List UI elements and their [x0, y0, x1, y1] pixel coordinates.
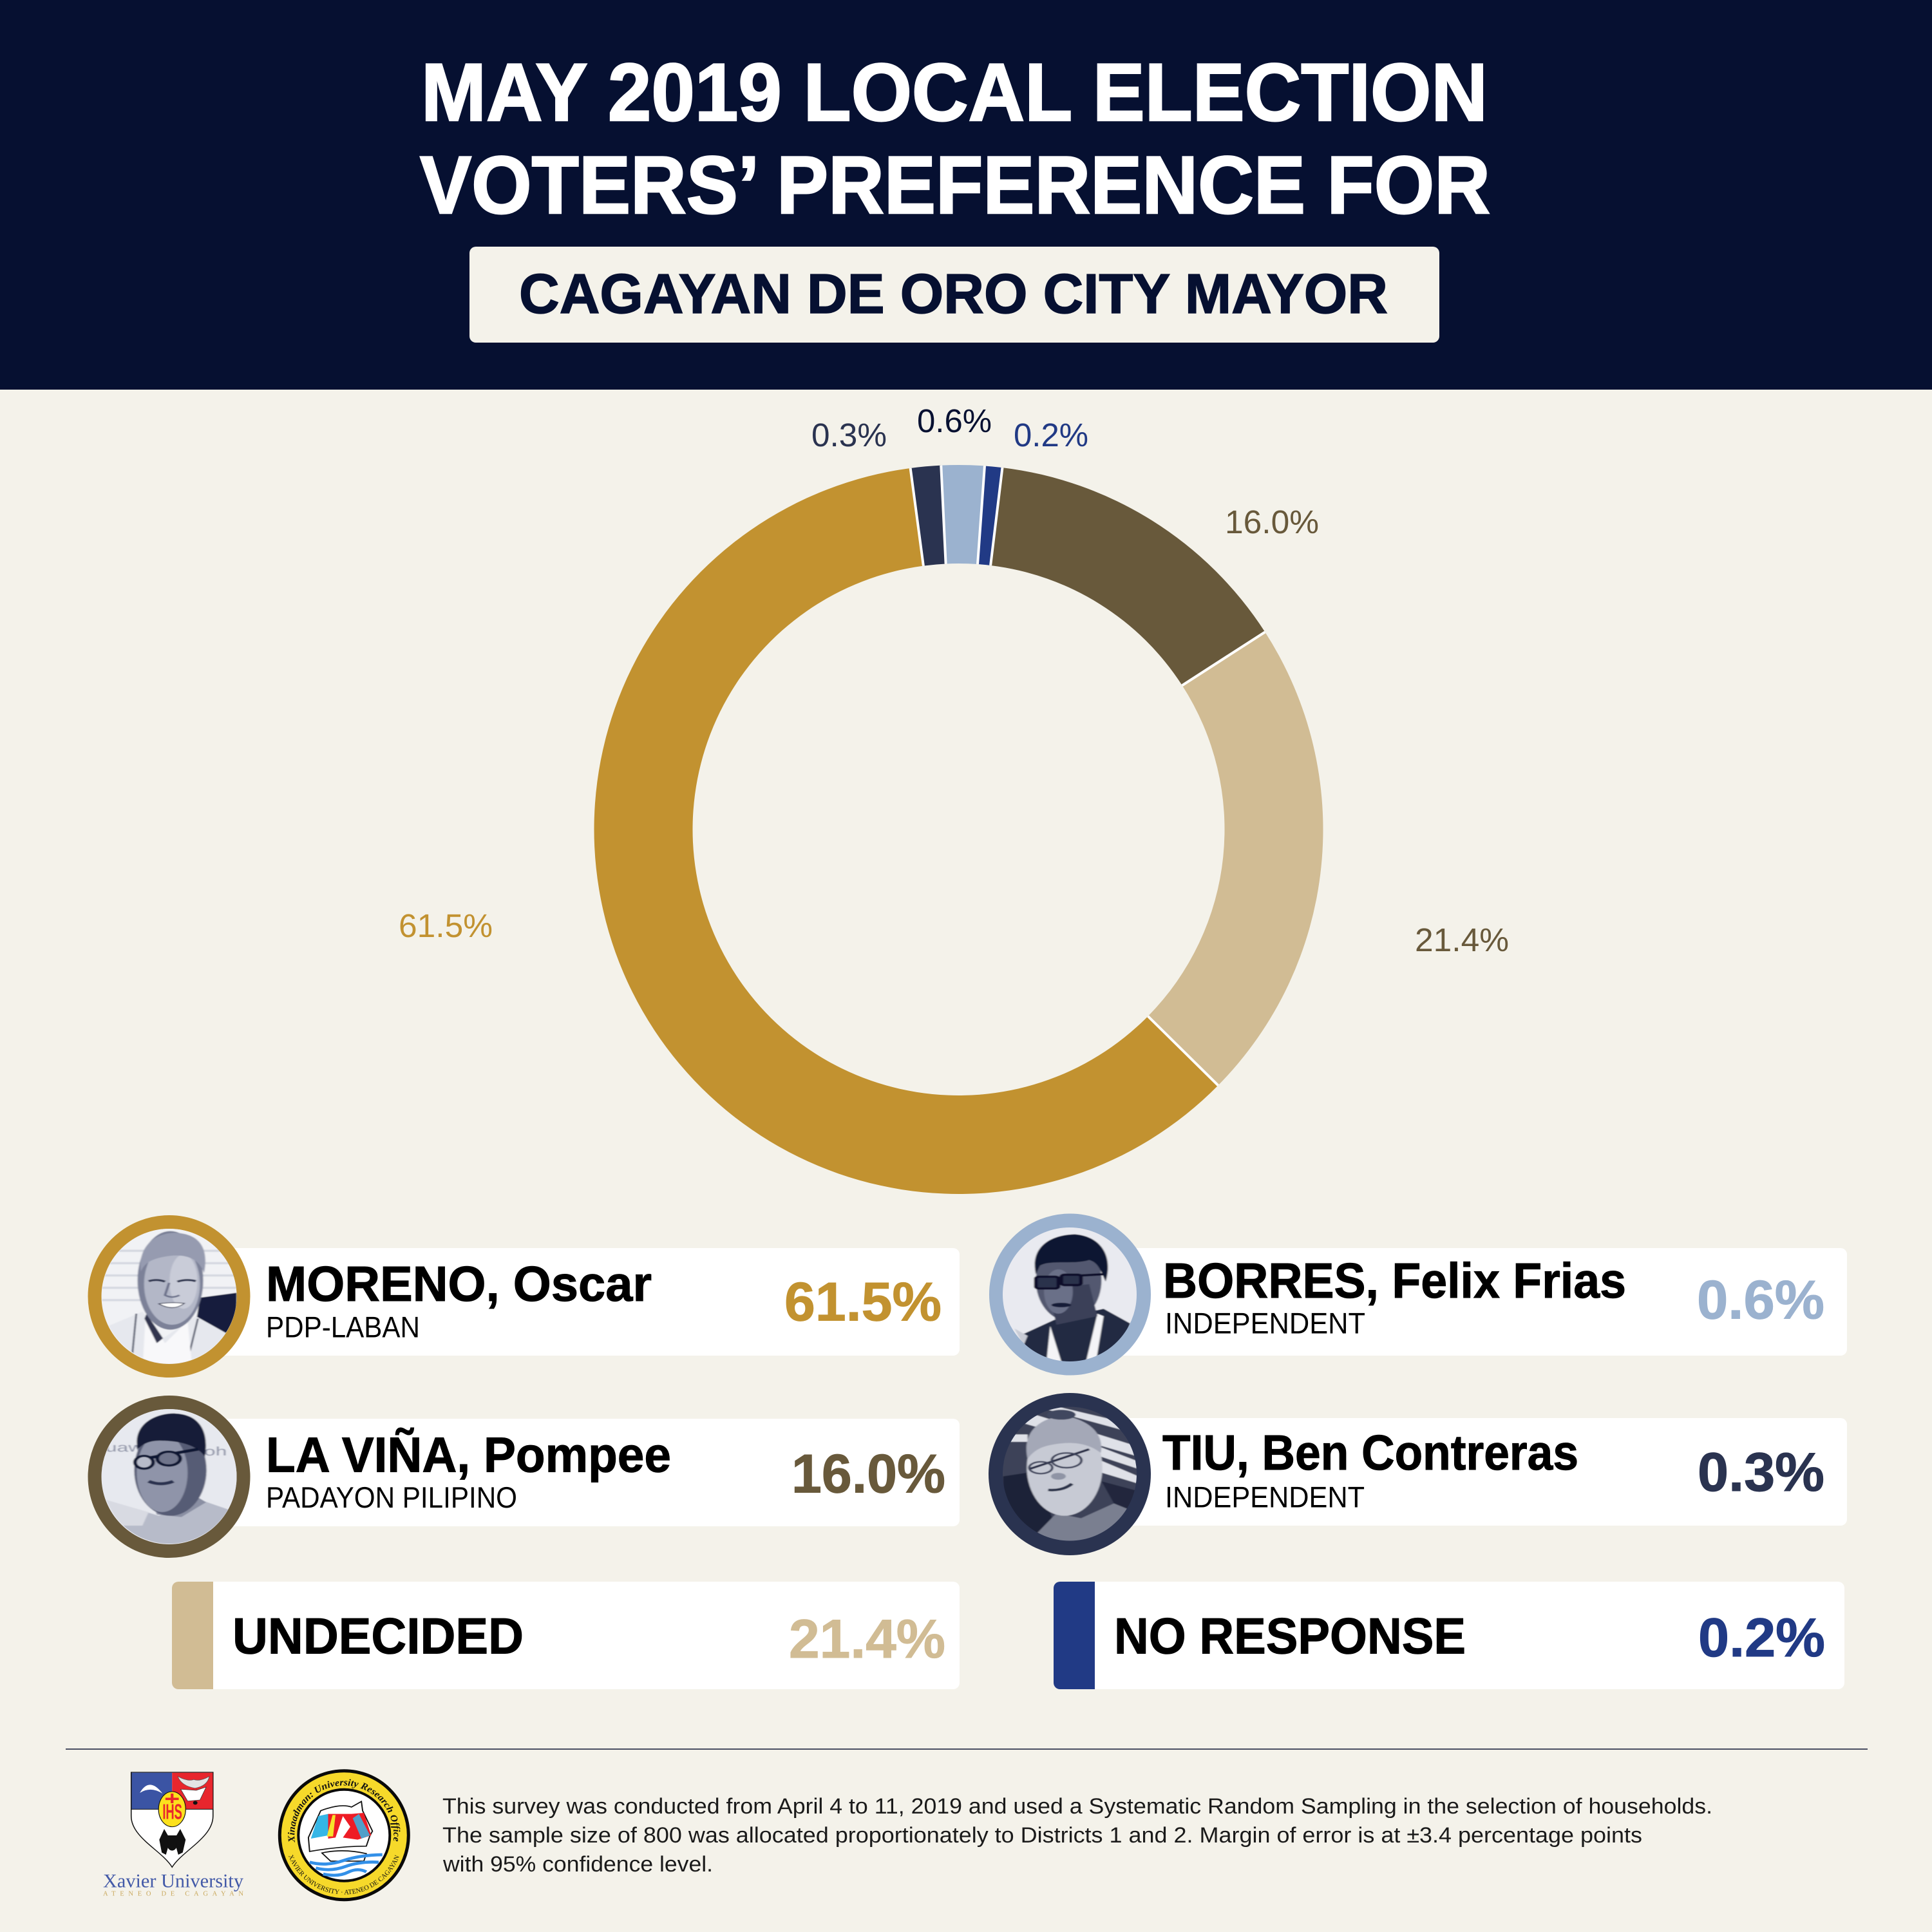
wordmark: Xavier University	[103, 1870, 243, 1892]
candidate name: BORRES, Felix Frias	[1163, 1253, 1626, 1309]
panel: No response	[1054, 1582, 1844, 1689]
title line 1: MAY 2019 LOCAL ELECTION	[421, 46, 1488, 138]
note line 2: The sample size of 800 was allocated proportionately to Districts 1 and 2. Margin of error is at ±3.4 percentage points	[442, 1823, 1642, 1848]
subtitle pill: CAGAYAN DE ORO CITY MAYOR	[519, 263, 1388, 325]
label: NO RESPONSE	[1114, 1607, 1466, 1664]
segment: Undecided 21.4%	[1148, 632, 1323, 1085]
segment: Moreno 61.5%	[594, 468, 1218, 1194]
donut label 0.3%: 0.3%	[811, 417, 887, 453]
donut label 0.2%: 0.2%	[1014, 417, 1088, 453]
value: 21.4%	[789, 1609, 945, 1670]
panel: Moreno	[95, 1222, 960, 1370]
donut label 16.0%: 16.0%	[1225, 504, 1319, 540]
party: PADAYON PILIPINO	[266, 1481, 517, 1514]
icon: shield	[131, 1772, 213, 1867]
candidate name: MORENO, Oscar	[266, 1256, 652, 1312]
icon: shield: IHS	[162, 1800, 182, 1824]
logo: Xavier University	[103, 1772, 243, 1897]
donut label 0.6%: 0.6%	[917, 402, 992, 439]
party: PDP-LABAN	[266, 1310, 420, 1343]
label: UNDECIDED	[232, 1607, 524, 1664]
value: 0.3%	[1698, 1442, 1824, 1503]
party: INDEPENDENT	[1165, 1306, 1365, 1340]
title line 2: VOTERS’ PREFERENCE FOR	[420, 139, 1490, 231]
icon: Moreno portrait	[95, 1222, 243, 1370]
candidate name: TIU, Ben Contreras	[1162, 1425, 1578, 1481]
panel: Borres	[997, 1221, 1847, 1368]
panel: Tiu	[996, 1401, 1847, 1548]
swatch: undecided	[172, 1582, 213, 1689]
party: INDEPENDENT	[1165, 1480, 1365, 1513]
value: 16.0%	[791, 1444, 945, 1504]
segment: Tiu 0.3%	[911, 466, 946, 566]
icon: La Viña portrait: uaw	[106, 1441, 144, 1454]
donut label 61.5%: 61.5%	[399, 907, 493, 944]
seal top text: Xinaadman: University Research Office	[287, 1779, 401, 1842]
note line 1: This survey was conducted from April 4 to 11, 2019 and used a Systematic Random Sampling in the selection of households.	[442, 1794, 1712, 1819]
logo: research office seal	[278, 1769, 410, 1901]
segment: Borres 0.6%	[941, 465, 985, 564]
icon: Borres portrait	[997, 1221, 1144, 1368]
donut chart	[594, 465, 1323, 1194]
panel: La Viña	[95, 1403, 960, 1551]
icon: Tiu portrait	[996, 1401, 1143, 1548]
swatch: no response	[1054, 1582, 1095, 1689]
segment: No response 0.2%	[978, 466, 1002, 565]
seal bottom text: XAVIER UNIVERSITY · ATENEO DE CAGAYAN	[289, 1855, 399, 1895]
value: 61.5%	[784, 1271, 942, 1333]
subtitle pill	[469, 247, 1439, 343]
note line 3: with 95% confidence level.	[442, 1852, 713, 1877]
candidate name: LA VIÑA, Pompee	[266, 1427, 671, 1482]
donut label 21.4%: 21.4%	[1415, 922, 1509, 958]
icon: La Viña portrait: oh	[204, 1444, 227, 1458]
survey note	[442, 1794, 1712, 1877]
tagline: ATENEO DE CAGAYAN	[103, 1891, 243, 1897]
icon: ship	[308, 1801, 383, 1875]
panel: Undecided	[172, 1582, 960, 1689]
segment: La Viña 16.0%	[990, 468, 1265, 685]
value: 0.2%	[1698, 1607, 1825, 1669]
header band	[0, 0, 1932, 390]
value: 0.6%	[1697, 1270, 1824, 1331]
icon: La Viña portrait	[95, 1403, 243, 1551]
